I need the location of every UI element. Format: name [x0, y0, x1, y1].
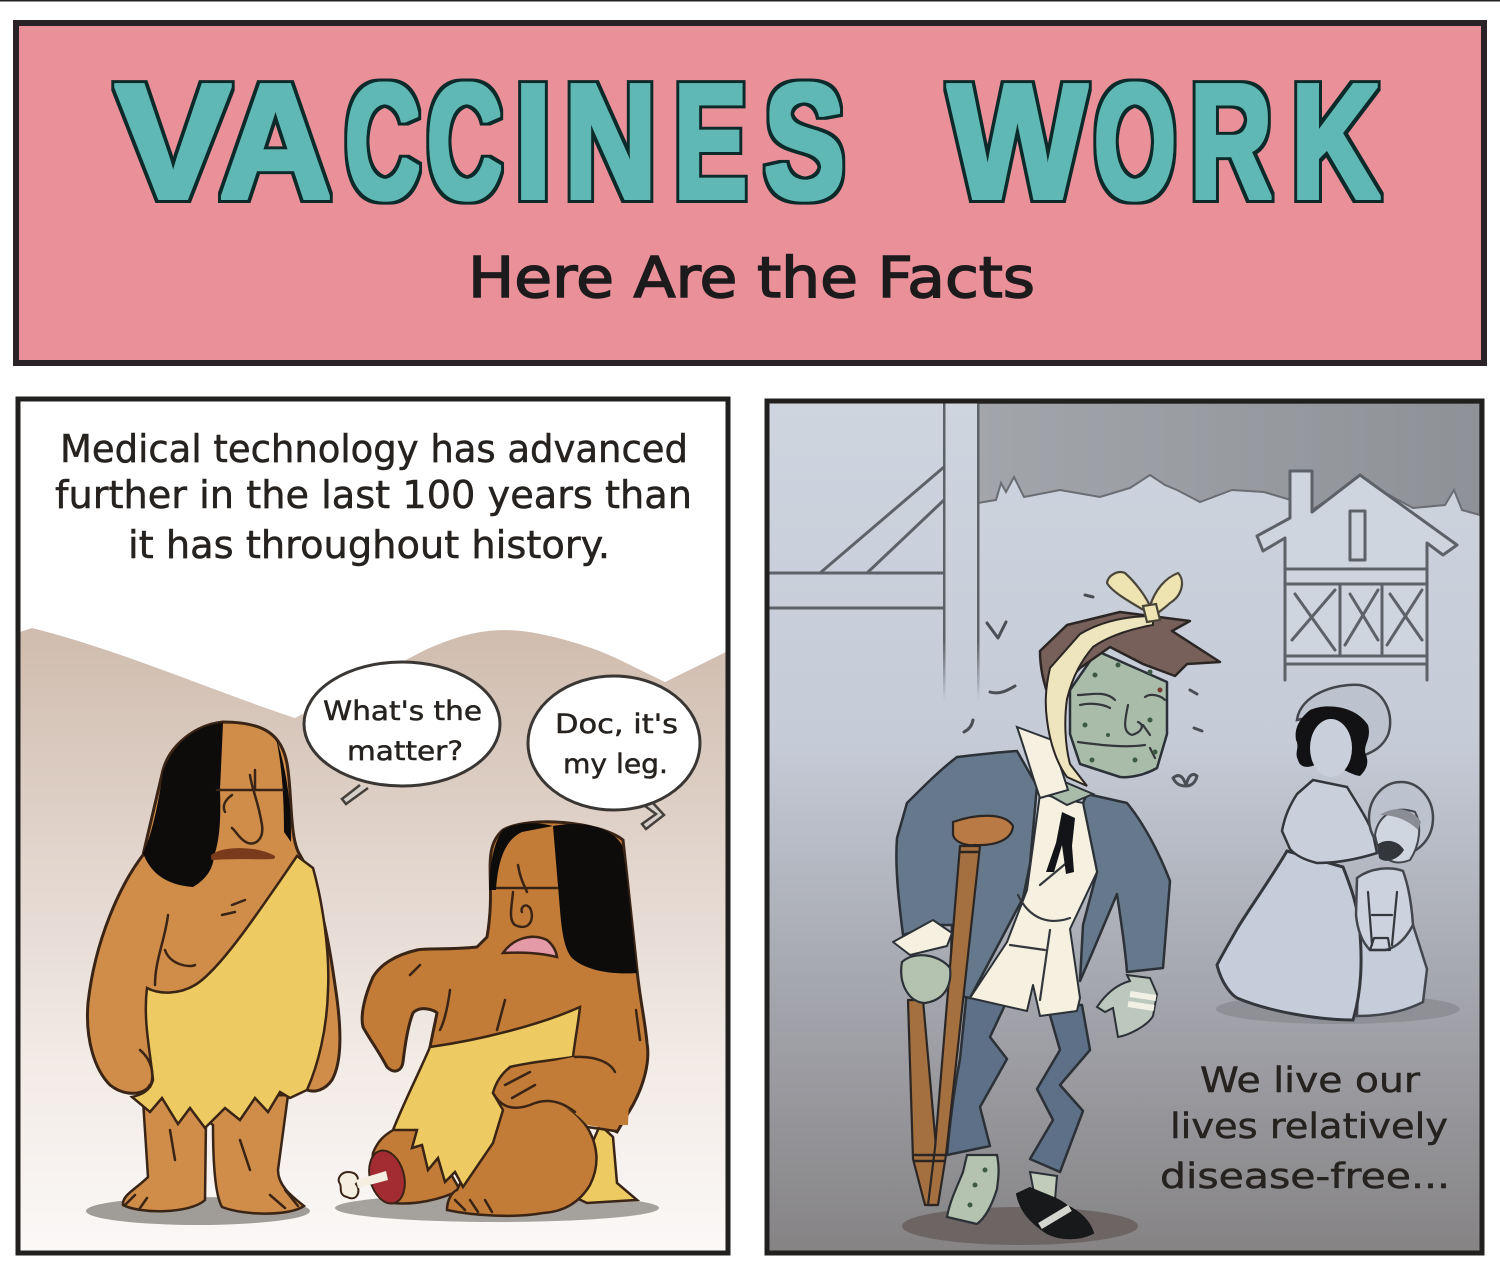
right hand with bandage [1097, 975, 1157, 1037]
hair [143, 723, 223, 887]
string tie [1046, 812, 1075, 874]
head [1070, 651, 1167, 777]
body and arms [87, 722, 340, 1093]
speech bubble: doc it's my leg [528, 676, 700, 829]
lower leg [447, 1093, 596, 1216]
barn [1257, 471, 1457, 664]
child skirt [1357, 925, 1427, 1016]
chest hair [410, 965, 640, 1040]
speech bubble: what's the matter: matter? [347, 736, 463, 767]
hair [489, 823, 637, 973]
caption: disease free: lives relatively [1170, 1107, 1448, 1147]
leg stump with bone [339, 1120, 460, 1207]
panel border [18, 399, 728, 1253]
fist and hair details [125, 900, 298, 1208]
sick man [893, 572, 1220, 1238]
dress tail [570, 1125, 637, 1203]
caption: disease free: We live our [1200, 1061, 1421, 1101]
child face [1375, 810, 1419, 862]
mother bodice [1282, 780, 1377, 863]
subtitle: Here Are the Facts [468, 246, 1035, 311]
bandage [1046, 616, 1153, 786]
spots [912, 662, 1162, 1208]
mouth [503, 937, 557, 957]
title [115, 50, 1380, 233]
collar [1017, 727, 1068, 798]
flies [964, 595, 1202, 786]
legs [123, 1095, 304, 1214]
dress [132, 856, 328, 1128]
background farm [769, 403, 1480, 700]
caption: medical technology: Medical technology has advanced [60, 427, 688, 471]
left hand [901, 955, 950, 1003]
title: W [948, 50, 1087, 233]
shirt creases [1010, 860, 1070, 1000]
shirt [970, 794, 1097, 1016]
mountains background [20, 628, 726, 1250]
caveman pointing at missing leg [335, 822, 659, 1222]
woman and child [1216, 685, 1460, 1024]
left foot [947, 1155, 999, 1224]
fence beam and braces [769, 467, 944, 608]
mother bonnet [1297, 685, 1390, 755]
title: I [514, 50, 552, 233]
fence post [943, 403, 980, 700]
dress [393, 1007, 580, 1187]
body [362, 822, 648, 1132]
crutch [908, 816, 1013, 1205]
title: C [345, 50, 420, 233]
caption: medical technology: it has throughout history. [128, 523, 610, 567]
bandage bow [1107, 572, 1182, 622]
panel: sick man [767, 401, 1482, 1253]
child hands [1368, 892, 1397, 950]
speech bubble: doc it's my leg: my leg. [563, 749, 668, 780]
mother face [1310, 719, 1352, 777]
caveman standing [86, 722, 340, 1225]
caption: medical technology: further in the last 100 years than [55, 473, 692, 517]
title: S [764, 50, 845, 233]
child torso [1356, 868, 1413, 950]
title: C [427, 50, 502, 233]
hair [1040, 612, 1220, 700]
title: N [564, 50, 657, 233]
right jacket [1080, 794, 1170, 981]
caption: medical technology [55, 427, 692, 567]
mother hand over child's mouth [1377, 841, 1404, 861]
title: V [115, 50, 231, 233]
speech bubble: what's the matter [304, 662, 500, 804]
face and chest [155, 770, 283, 985]
title: K [1291, 50, 1380, 233]
neck [1040, 777, 1093, 805]
title: R [1190, 50, 1272, 233]
forearm and hand on knee [493, 1057, 630, 1125]
face [497, 865, 557, 927]
mother skirt [1217, 851, 1361, 1020]
shadow on ground [902, 1207, 1138, 1245]
speech bubble: what's the matter: What's the [323, 696, 482, 727]
title: E [674, 50, 747, 233]
left jacket and sleeve [896, 751, 1037, 998]
left cuff [893, 920, 952, 955]
mother hair [1296, 706, 1369, 776]
title: O [1094, 50, 1176, 233]
title: A [219, 50, 332, 233]
caption: disease free: disease-free... [1160, 1157, 1450, 1197]
trousers [947, 990, 1090, 1172]
panel border [767, 401, 1482, 1253]
limb creases [455, 1057, 615, 1212]
face details [1078, 694, 1165, 758]
right foot and shoe [1030, 1172, 1057, 1200]
panel: cavemen [18, 399, 728, 1253]
hair strip [276, 738, 291, 842]
torso lower [510, 1040, 644, 1130]
mouth [213, 850, 273, 858]
panel: title banner [16, 23, 1484, 363]
caption: disease free [1160, 1061, 1450, 1197]
speech bubble: doc it's my leg: Doc, it's [555, 709, 678, 740]
child bonnet [1369, 782, 1433, 854]
